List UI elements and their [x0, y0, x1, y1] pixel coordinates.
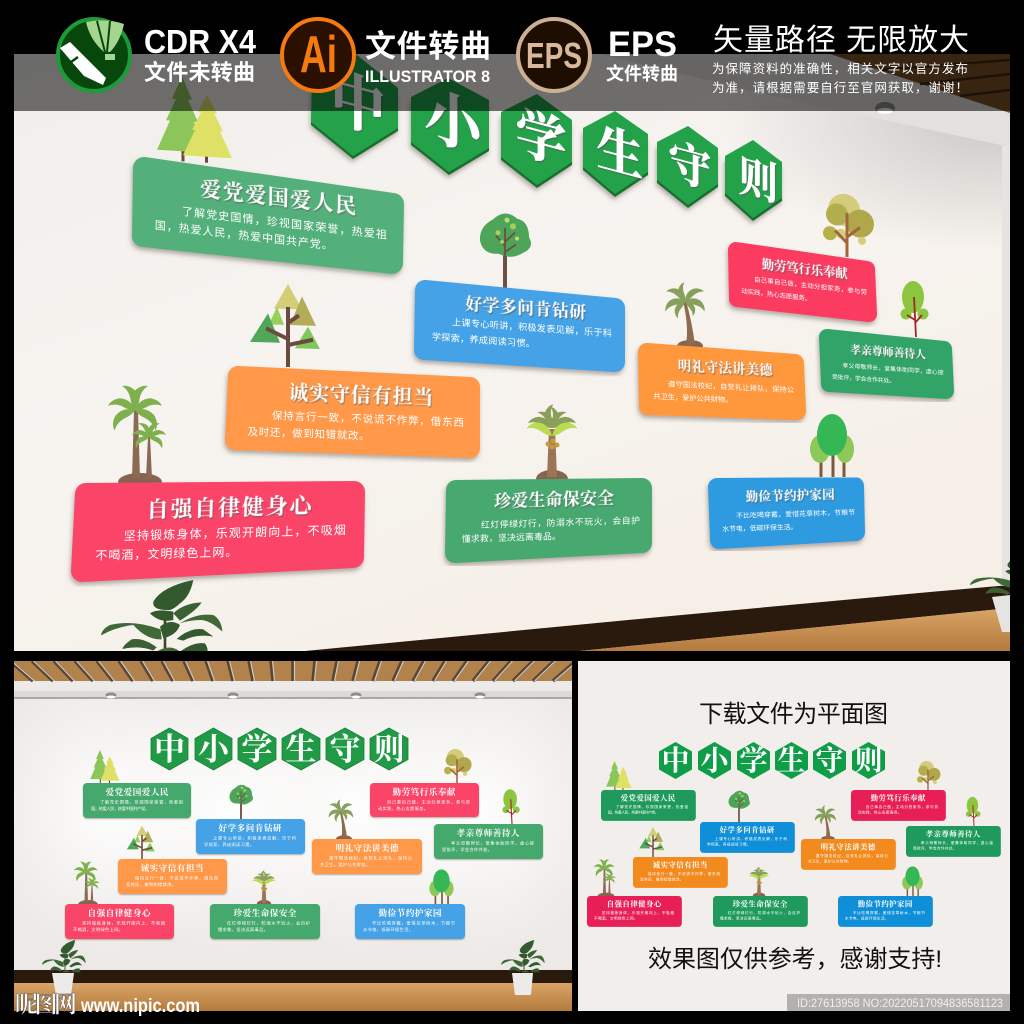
- card: 诚实守信有担当: [118, 859, 227, 894]
- image ID strip: ID:27613958 NO:20220517094836581123: [797, 998, 1003, 1010]
- card: 勤劳笃行乐奉献: [736, 250, 869, 314]
- card: 诚实守信有担当: [235, 376, 470, 448]
- title hexagons: 中小学生守则: 学: [515, 102, 567, 176]
- card: 好学多问肯钻研: [424, 290, 615, 362]
- card: 勤俭节约护家园: 水节电，低碳环保生活。: [722, 522, 797, 533]
- header: Ai badge: 文件转曲: [365, 29, 491, 64]
- card: 爱党爱国爱人民: 国，热爱人民，热爱中国共产党。: [155, 218, 333, 253]
- card: 爱党爱国爱人民: [83, 783, 191, 818]
- card: 珍爱生命保安全: 红灯停绿灯行，防溺水不玩火，会自护: [481, 514, 640, 530]
- card: 爱党爱国爱人民: [601, 790, 696, 821]
- card: 好学多问肯钻研: 上课专心听讲，积极发表见解，乐于科: [452, 316, 612, 339]
- header: vector note: [712, 24, 969, 95]
- icon: CDR: [58, 19, 130, 91]
- card: 自强自律健身心: 不喝酒，文明绿色上网。: [95, 544, 238, 563]
- icon: EPS: [518, 19, 590, 91]
- header: vector note: 为准，请根据需要自行至官网获取，谢谢！: [712, 80, 968, 95]
- title hexagons: 中小学生守则: 守: [668, 136, 712, 198]
- card: 孝亲尊师善待人: 孝父母敬师长，爱集体助同学，虚心接: [842, 361, 944, 377]
- tree: double palm: [108, 386, 166, 483]
- panel: main 3D wall view: [14, 0, 1024, 652]
- tree: round green: [480, 212, 531, 289]
- card: 珍爱生命保安全: 懂求救，坚决远离毒品。: [218, 926, 268, 933]
- header: Ai badge: ILLUSTRATOR 8: [365, 67, 490, 86]
- ceiling light: [875, 102, 895, 114]
- title hexagons: 学: [242, 732, 272, 767]
- card: 自强自律健身心: 自强自律健身心: [607, 898, 663, 908]
- dark skirting band: [305, 585, 1010, 651]
- panel: front wall view: [0, 660, 610, 1011]
- dark header overlay band: [14, 54, 1010, 111]
- card: 勤俭节约护家园: 不比吃喝穿戴，爱惜花草树木，节粮节: [736, 508, 855, 520]
- card: 诚实守信有担当: 诚实守信有担当: [288, 381, 434, 409]
- card: 珍爱生命保安全: 珍爱生命保安全: [234, 907, 297, 918]
- card: 珍爱生命保安全: 红灯停绿灯行，防溺水不玩火，会自护: [227, 920, 310, 926]
- card: 好学多问肯钻研: 学探索，养成阅读习惯。: [204, 841, 254, 848]
- card: 诚实守信有担当: 及时还，做到知错就改。: [640, 876, 683, 881]
- right wall edge: [1002, 146, 1010, 586]
- card: 勤劳笃行乐奉献: 勤劳笃行乐奉献: [392, 786, 457, 797]
- icon: Ai: Ai: [300, 26, 337, 84]
- card: 勤俭节约护家园: 勤俭节约护家园: [378, 907, 442, 918]
- header: vector note: 为保障资料的准确性，相关文字以官方发布: [712, 61, 968, 76]
- card: 孝亲尊师善待人: [434, 824, 543, 859]
- card: 明礼守法讲美德: 遵守国法校纪，自觉礼让排队，保持公: [816, 853, 888, 858]
- card: 诚实守信有担当: 诚实守信有担当: [653, 859, 707, 869]
- tree: olive round: [823, 193, 874, 258]
- title hexagons: 中: [661, 745, 690, 777]
- card: 自强自律健身心: [587, 896, 682, 927]
- card: 好学多问肯钻研: 好学多问肯钻研: [720, 824, 775, 834]
- watermark: nipic: www.nipic.com: [80, 996, 200, 1017]
- card: 珍爱生命保安全: 珍爱生命保安全: [733, 898, 788, 908]
- header: CDR X4 badge: [58, 19, 257, 91]
- card: 自强自律健身心: 坚持锻炼身体，乐观开朗向上，不吸烟: [602, 910, 674, 915]
- floor: [14, 983, 572, 1011]
- tree: light green: [900, 281, 928, 337]
- card: 勤俭节约护家园: 水节电，低碳环保生活。: [845, 915, 888, 920]
- ceiling lights: [106, 692, 486, 698]
- card: 好学多问肯钻研: 学探索，养成阅读习惯。: [707, 841, 750, 846]
- card: 诚实守信有担当: 保持言行一致，不说谎不作弊，借东西: [272, 409, 464, 429]
- trees: [74, 749, 520, 908]
- title hexagons: 守: [815, 745, 844, 777]
- title hexagons: 则: [374, 732, 404, 767]
- card: 明礼守法讲美德: 遵守国法校纪，自觉礼让排队，保持公: [668, 379, 794, 394]
- card: 好学多问肯钻研: 好学多问肯钻研: [218, 822, 282, 833]
- card: 勤劳笃行乐奉献: 动实践，热心志愿服务。: [741, 286, 811, 303]
- card: 诚实守信有担当: 诚实守信有担当: [140, 862, 204, 873]
- card: 孝亲尊师善待人: [827, 337, 946, 391]
- card: 明礼守法讲美德: 共卫生，爱护公共财物。: [808, 858, 851, 863]
- card: 勤劳笃行乐奉献: 自己事自己做，主动分担家务，参与劳: [754, 275, 868, 297]
- card: 勤俭节约护家园: [717, 486, 856, 540]
- card: 爱党爱国爱人民: 爱党爱国爱人民: [620, 792, 676, 802]
- card: 自强自律健身心: 坚持锻炼身体，乐观开朗向上，不吸烟: [124, 522, 346, 543]
- heading: 下载文件为平面图: [699, 701, 888, 728]
- card: 明礼守法讲美德: [647, 352, 797, 411]
- title hexagons: 小: [198, 732, 232, 767]
- header: EPS badge: 文件转曲: [606, 63, 678, 84]
- plant and pot: right: [501, 940, 545, 995]
- plant and pot: right edge: [970, 561, 1010, 632]
- card: 珍爱生命保安全: [210, 904, 320, 939]
- card: 好学多问肯钻研: 上课专心听讲，积极发表见解，乐于科: [213, 834, 297, 842]
- card: 自强自律健身心: 自强自律健身心: [88, 907, 152, 918]
- watermark: nipic: [15, 992, 200, 1017]
- card: 勤俭节约护家园: 勤俭节约护家园: [858, 898, 913, 908]
- wood ceiling corner: [830, 54, 1010, 113]
- card: 诚实守信有担当: 及时还，做到知错就改。: [126, 881, 176, 888]
- card: 勤劳笃行乐奉献: [370, 783, 479, 817]
- card: 明礼守法讲美德: 遵守国法校纪，自觉礼让排队，保持公: [329, 854, 413, 862]
- header: EPS badge: EPS: [608, 25, 677, 64]
- header: CDR X4 badge: 文件未转曲: [144, 60, 255, 85]
- card: 明礼守法讲美德: 共卫生，爱护公共财物。: [320, 861, 370, 868]
- card: 珍爱生命保安全: [455, 487, 642, 553]
- title hexagons: 生: [777, 745, 806, 777]
- card: 诚实守信有担当: 保持言行一致，不说谎不作弊，借东西: [135, 874, 218, 882]
- card: 孝亲尊师善待人: 受批评，学会合作共处。: [832, 373, 895, 385]
- card: 好学多问肯钻研: [196, 819, 305, 854]
- card: 自强自律健身心: [65, 904, 174, 939]
- card: 爱党爱国爱人民: [143, 168, 393, 263]
- card: 勤俭节约护家园: 不比吃喝穿戴，爱惜花草树木，节粮节: [853, 910, 925, 915]
- card: 爱党爱国爱人民: 爱党爱国爱人民: [104, 786, 169, 797]
- card: 孝亲尊师善待人: 孝父母敬师长，爱集体助同学，虚心接: [451, 840, 535, 846]
- card: 好学多问肯钻研: [700, 822, 795, 853]
- card: 明礼守法讲美德: 明礼守法讲美德: [677, 357, 774, 378]
- title hexagons: 中小学生守则: 则: [738, 152, 778, 211]
- tree: triangles: [250, 283, 320, 368]
- image ID strip: [787, 994, 1010, 1011]
- card: 自强自律健身心: 自强自律健身心: [146, 493, 315, 522]
- card: 勤俭节约护家园: [355, 904, 465, 939]
- title hexagons: 中小学生守则: 生: [597, 120, 643, 188]
- title hexagons: [151, 728, 408, 770]
- card: 好学多问肯钻研: 学探索，养成阅读习惯。: [432, 331, 535, 349]
- card: 爱党爱国爱人民: 了解党史国情，珍视国家荣誉，热爱祖: [100, 798, 184, 806]
- header: vector note: 矢量路径 无限放大: [713, 24, 969, 57]
- header: CDR X4 badge: CDR X4: [144, 23, 257, 60]
- card: 好学多问肯钻研: 好学多问肯钻研: [465, 294, 586, 322]
- title hexagons: 学: [739, 745, 768, 777]
- title hexagons: 生: [286, 732, 316, 767]
- card: 勤俭节约护家园: 勤俭节约护家园: [745, 487, 835, 504]
- wooden floor: [580, 608, 1010, 651]
- wall shading top right: [772, 109, 1010, 226]
- card: 明礼守法讲美德: [801, 839, 896, 870]
- card: 爱党爱国爱人民: 爱党爱国爱人民: [199, 177, 356, 219]
- tree: pines: [157, 75, 232, 164]
- title hexagons: 守: [330, 732, 360, 767]
- trees: [594, 761, 980, 900]
- card: 孝亲尊师善待人: [906, 826, 1001, 857]
- card: 珍爱生命保安全: [713, 896, 808, 927]
- icon: Ai: [282, 19, 354, 91]
- wall surface: [14, 54, 1010, 651]
- card: 自强自律健身心: 不喝酒，文明绿色上网。: [73, 926, 123, 933]
- card: 孝亲尊师善待人: 孝亲尊师善待人: [926, 828, 981, 838]
- watermark: nipic: 昵图网: [15, 992, 77, 1017]
- tree: slim palm: [665, 282, 705, 348]
- card: 诚实守信有担当: [633, 857, 728, 888]
- card: 爱党爱国爱人民: 国，热爱人民，热爱中国共产党。: [91, 805, 149, 812]
- card: 明礼守法讲美德: [312, 839, 422, 874]
- card: 爱党爱国爱人民: 国，热爱人民，热爱中国共产党。: [608, 809, 658, 814]
- plant and pot: left: [42, 940, 86, 995]
- card: 勤俭节约护家园: 水节电，低碳环保生活。: [363, 926, 413, 933]
- ceiling soffit: [640, 54, 1010, 146]
- header: EPS badge: [518, 19, 678, 91]
- card: 明礼守法讲美德: 明礼守法讲美德: [821, 841, 876, 851]
- footer note: 效果图仅供参考，感谢支持!: [648, 946, 942, 973]
- card: 孝亲尊师善待人: 受批评，学会合作共处。: [913, 845, 956, 850]
- card: 爱党爱国爱人民: 了解党史国情，珍视国家荣誉，热爱祖: [616, 804, 688, 809]
- card: 勤劳笃行乐奉献: 自己事自己做，主动分担家务，参与劳: [866, 804, 938, 809]
- card: 自强自律健身心: 不喝酒，文明绿色上网。: [594, 915, 637, 920]
- card: 诚实守信有担当: 及时还，做到知错就改。: [247, 425, 370, 443]
- card: 好学多问肯钻研: 上课专心听讲，积极发表见解，乐于科: [715, 836, 787, 841]
- card: 珍爱生命保安全: 红灯停绿灯行，防溺水不玩火，会自护: [728, 910, 800, 915]
- card: 勤劳笃行乐奉献: 自己事自己做，主动分担家务，参与劳: [387, 798, 470, 806]
- title hexagons: [659, 742, 885, 779]
- card: 孝亲尊师善待人: 孝父母敬师长，爱集体助同学，虚心接: [921, 840, 993, 845]
- card: 爱党爱国爱人民: 了解党史国情，珍视国家荣誉，热爱祖: [182, 204, 387, 242]
- title hexagons: 小: [700, 746, 731, 777]
- title hexagons: 中小学生守则: 小: [425, 82, 486, 165]
- card: 孝亲尊师善待人: 受批评，学会合作共处。: [442, 846, 492, 853]
- card: 自强自律健身心: [82, 492, 354, 571]
- skirting: [14, 970, 572, 983]
- wood slat ceiling: [10, 661, 578, 681]
- card: 明礼守法讲美德: 明礼守法讲美德: [336, 842, 400, 853]
- card: 孝亲尊师善待人: 孝亲尊师善待人: [456, 827, 520, 838]
- card: 勤劳笃行乐奉献: 勤劳笃行乐奉献: [871, 792, 926, 802]
- soffit: [14, 681, 572, 692]
- card: 勤俭节约护家园: 不比吃喝穿戴，爱惜花草树木，节粮节: [372, 920, 455, 926]
- card: 珍爱生命保安全: 懂求救，坚决远离毒品。: [462, 530, 561, 544]
- card: 珍爱生命保安全: 珍爱生命保安全: [494, 488, 614, 511]
- header: Ai badge: [282, 19, 491, 91]
- plant: large foreground: [101, 580, 222, 652]
- card: 勤劳笃行乐奉献: 勤劳笃行乐奉献: [761, 256, 849, 281]
- card: 勤俭节约护家园: [838, 896, 933, 927]
- title hexagons: 则: [854, 745, 883, 777]
- panel: flat artwork view: [578, 661, 1010, 1011]
- card: 勤劳笃行乐奉献: 动实践，热心志愿服务。: [858, 809, 901, 814]
- card: 诚实守信有担当: 保持言行一致，不说谎不作弊，借东西: [648, 871, 720, 876]
- wall: [14, 698, 572, 970]
- title hexagons: 中小学生守则: [311, 55, 782, 221]
- card: 自强自律健身心: 坚持锻炼身体，乐观开朗向上，不吸烟: [82, 920, 165, 926]
- card: 明礼守法讲美德: 共卫生，爱护公共财物。: [653, 392, 732, 404]
- card: 勤劳笃行乐奉献: 动实践，热心志愿服务。: [378, 805, 428, 812]
- tree: coconut palm: [526, 404, 578, 480]
- card: 珍爱生命保安全: 懂求救，坚决远离毒品。: [720, 915, 763, 920]
- title hexagons: 中: [154, 732, 185, 767]
- card: 勤劳笃行乐奉献: [851, 790, 946, 821]
- icon: EPS: EPS: [526, 35, 582, 76]
- card: 孝亲尊师善待人: 孝亲尊师善待人: [850, 342, 926, 361]
- tree: three ovals: [810, 414, 854, 477]
- title hexagons: 中小学生守则: 中: [330, 63, 386, 146]
